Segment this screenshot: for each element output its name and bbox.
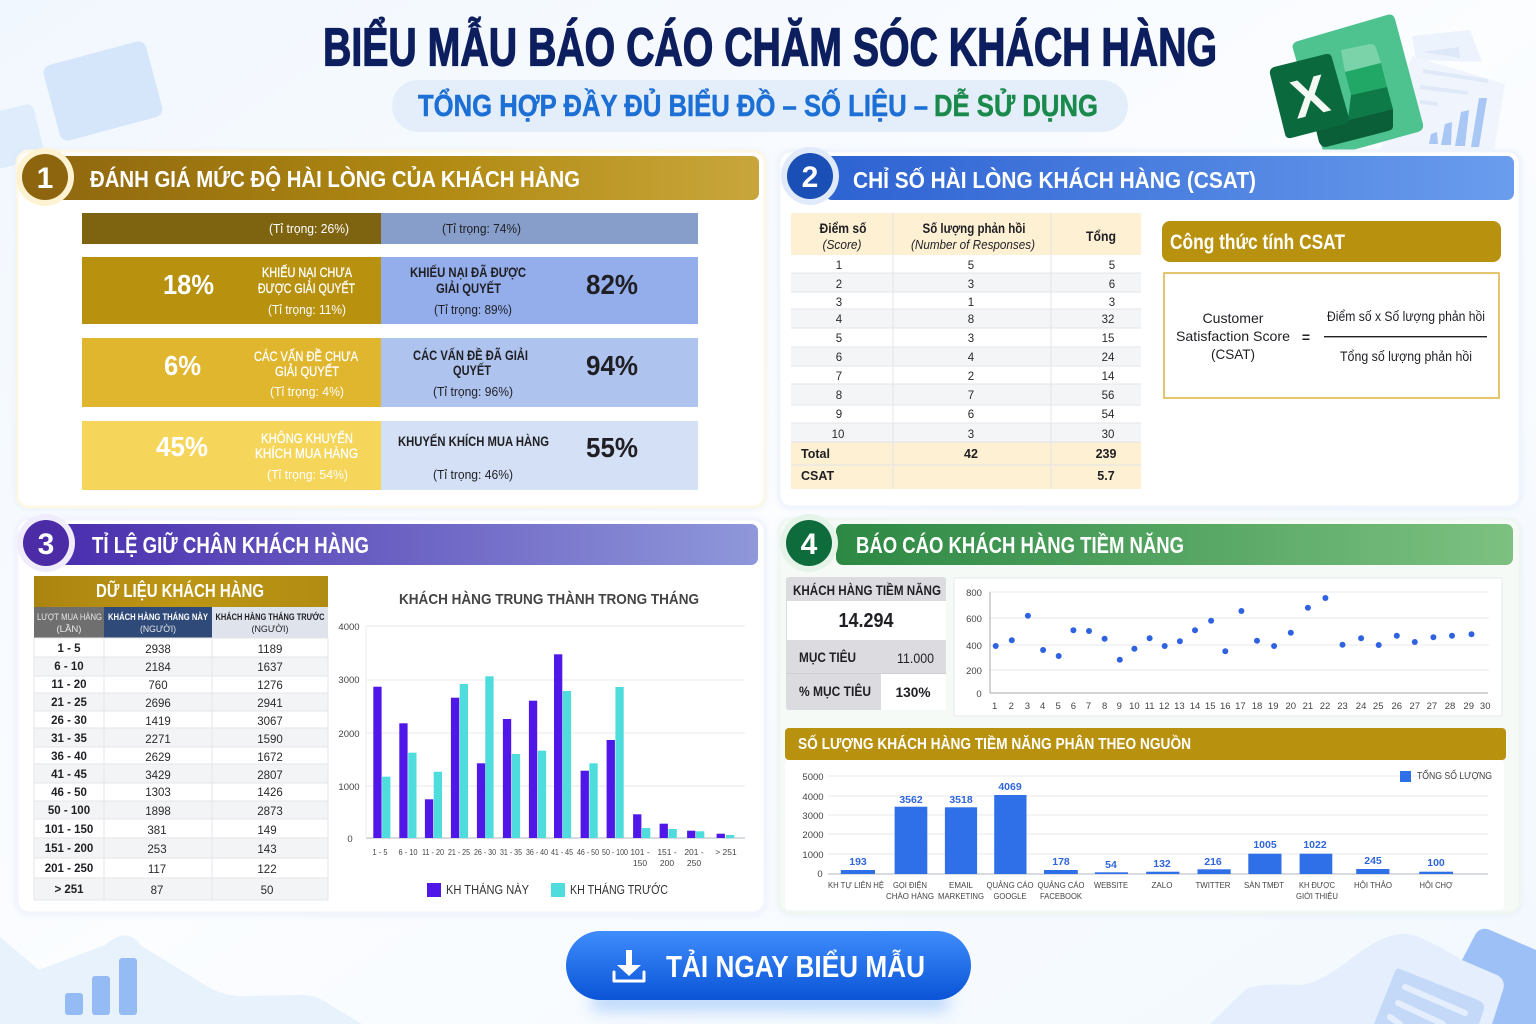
- scatter chart: [954, 578, 1502, 716]
- row: complaints: KHIẾU NẠI ĐÃ ĐƯỢC: [410, 265, 526, 280]
- x axis labels: 27: [1427, 701, 1437, 712]
- formula box: [1164, 273, 1499, 398]
- x axis labels: 150: [633, 858, 647, 868]
- x axis labels: 50 - 100: [602, 847, 628, 857]
- header bar 4: BÁO CÁO KHÁCH HÀNG TIỀM NĂNG: [856, 531, 1184, 558]
- value labels: [849, 781, 1445, 871]
- table rows: 1426: [257, 787, 283, 799]
- table totals: Total: [801, 447, 830, 461]
- table rows: 6: [1109, 279, 1115, 291]
- table column headers: KHÁCH HÀNG THÁNG TRƯỚC: [216, 611, 325, 623]
- table rows: 6 - 10: [54, 661, 84, 673]
- x axis labels: 9: [1117, 701, 1122, 712]
- category labels: [828, 879, 1453, 901]
- table rows: 1590: [257, 734, 283, 746]
- header bar 2: CHỈ SỐ HÀI LÒNG KHÁCH HÀNG (CSAT): [853, 165, 1256, 193]
- x axis labels: 26 - 30: [474, 847, 496, 857]
- table rows: 30: [1102, 429, 1114, 441]
- KPI card: KHÁCH HÀNG TIỀM NĂNG: [793, 582, 941, 598]
- x axis labels: 4: [1040, 701, 1045, 712]
- x axis labels: 200: [660, 858, 674, 868]
- bar chart: leads by source: [785, 760, 1504, 910]
- table rows: > 251: [54, 884, 84, 896]
- chart legend: [427, 882, 668, 897]
- x axis labels: 29: [1463, 701, 1474, 712]
- table rows: 2184: [145, 662, 171, 674]
- table totals: 42: [964, 447, 978, 461]
- row: weights summary: (Tỉ trọng: 74%): [442, 222, 521, 236]
- row: issues: 94%: [586, 350, 638, 381]
- formula box: (CSAT): [1211, 346, 1255, 362]
- table totals: 5.7: [1097, 469, 1115, 483]
- y axis labels: 400: [966, 641, 982, 652]
- value labels: 54: [1105, 859, 1117, 871]
- header bar 1: ĐÁNH GIÁ MỨC ĐỘ HÀI LÒNG CỦA KHÁCH HÀNG: [90, 164, 580, 192]
- y axis labels: 3000: [802, 811, 824, 822]
- table rows: 6: [836, 352, 842, 364]
- table header: Tổng: [1086, 229, 1116, 244]
- x axis labels: 27: [1410, 701, 1420, 712]
- table header: [820, 221, 1116, 252]
- bars this month: [373, 654, 725, 838]
- table rows: 2873: [257, 806, 283, 818]
- table rows: 1898: [145, 806, 171, 818]
- row: recommendation: (Tỉ trọng: 46%): [433, 467, 513, 482]
- category labels: CHÀO HÀNG: [886, 891, 934, 901]
- table rows: 4: [836, 314, 843, 326]
- header bar 1: [16, 148, 759, 206]
- table rows: 1: [968, 297, 974, 309]
- table rows: 2271: [145, 734, 171, 746]
- table rows: 381: [147, 825, 167, 837]
- table: CSAT scores: [791, 213, 1141, 489]
- category labels: SÀN TMĐT: [1244, 880, 1284, 890]
- y axis labels: 0: [347, 834, 353, 845]
- source heading: [785, 728, 1506, 760]
- table rows: 4: [968, 352, 975, 364]
- table rows: 26 - 30: [51, 715, 87, 727]
- source heading: SỐ LƯỢNG KHÁCH HÀNG TIỀM NĂNG PHÂN THEO NGUỒN: [798, 733, 1191, 753]
- table rows: 2941: [257, 698, 283, 710]
- decoration: bottom-left mountains and bars: [0, 936, 362, 1024]
- row: recommendation: KHUYẾN KHÍCH MUA HÀNG: [398, 434, 549, 449]
- table rows: 253: [147, 844, 167, 856]
- row: issues: CÁC VẤN ĐỀ CHƯA: [254, 349, 358, 364]
- bar chart: loyal customers: [338, 591, 745, 897]
- x axis labels: 21 - 25: [448, 847, 470, 857]
- table rows: 1419: [145, 716, 171, 728]
- value labels: 132: [1153, 858, 1171, 870]
- table totals: CSAT: [801, 469, 834, 483]
- chart legend: [1400, 768, 1492, 782]
- x axis labels: [992, 701, 1490, 712]
- y axis labels: 4000: [338, 622, 360, 633]
- chart legend: KH THÁNG TRƯỚC: [570, 882, 668, 897]
- category labels: EMAIL: [949, 880, 973, 890]
- table rows: 3: [968, 279, 974, 291]
- row: complaints: (Tỉ trọng: 89%): [434, 302, 512, 317]
- chart legend: KH THÁNG NÀY: [446, 882, 529, 897]
- icon: download: [614, 950, 644, 981]
- table rows: 50 - 100: [48, 805, 90, 817]
- table column headers: (LẦN): [56, 624, 82, 635]
- value labels: 193: [849, 856, 867, 868]
- x axis labels: 20: [1286, 701, 1296, 712]
- value labels: 216: [1204, 856, 1222, 868]
- bars: [841, 795, 1453, 874]
- value labels: 1022: [1303, 839, 1327, 851]
- table rows: 11 - 20: [51, 679, 87, 691]
- table column headers: (NGƯỜI): [140, 624, 176, 635]
- table column headers: [34, 607, 328, 638]
- x axis labels: 41 - 45: [551, 847, 573, 857]
- category labels: FACEBOOK: [1040, 891, 1082, 901]
- table rows: 14: [1102, 371, 1115, 383]
- table rows: 1637: [257, 662, 283, 674]
- table rows: 122: [257, 864, 277, 876]
- formula box: =: [1302, 329, 1310, 345]
- row: complaints: 18%: [163, 269, 214, 300]
- x axis labels: 151 -: [657, 847, 677, 857]
- formula box: Điểm số x Số lượng phản hồi: [1327, 309, 1485, 324]
- table rows: 7: [968, 390, 974, 402]
- formula box: Tổng số lượng phản hồi: [1340, 349, 1472, 364]
- table rows: 9: [836, 409, 842, 421]
- panel 1: customer satisfaction: [16, 148, 765, 507]
- header bar 3: 3: [38, 528, 54, 561]
- value labels: 1005: [1253, 839, 1277, 851]
- x axis labels: 25: [1373, 701, 1383, 712]
- y axis labels: 0: [976, 689, 982, 700]
- table rows: 101 - 150: [45, 824, 93, 836]
- table rows: 201 - 250: [45, 863, 93, 875]
- table rows: 5: [1109, 260, 1115, 272]
- row: weights summary: (Tỉ trọng: 26%): [269, 222, 349, 236]
- table header: Điểm số: [820, 221, 866, 236]
- x axis labels: 10: [1129, 701, 1140, 712]
- value labels: 3518: [949, 794, 973, 806]
- table header: (Score): [822, 238, 862, 252]
- row: recommendation: [82, 421, 698, 490]
- table rows: 15: [1102, 333, 1114, 345]
- KPI card: 14.294: [838, 610, 894, 632]
- table totals: 239: [1096, 447, 1116, 461]
- download button: [566, 931, 971, 1012]
- x axis labels: 7: [1086, 701, 1091, 712]
- table rows: 7: [836, 371, 842, 383]
- table rows: 3429: [145, 770, 171, 782]
- icon: Excel logo: [1270, 14, 1423, 156]
- row: issues: (Tỉ trọng: 96%): [433, 384, 513, 399]
- table title: [34, 576, 328, 607]
- value labels: 178: [1052, 856, 1070, 868]
- x axis labels: 11: [1145, 701, 1155, 712]
- category labels: MARKETING: [938, 891, 984, 901]
- x axis labels: 17: [1235, 701, 1246, 712]
- row: complaints: GIẢI QUYẾT: [436, 281, 502, 296]
- category labels: QUẢNG CÁO: [986, 879, 1034, 890]
- table column headers: LƯỢT MUA HÀNG: [37, 612, 102, 623]
- table rows: 21 - 25: [51, 697, 88, 709]
- x axis labels: > 251: [715, 847, 737, 857]
- row: recommendation: KHÍCH MUA HÀNG: [255, 446, 358, 461]
- category labels: HỘI THẢO: [1354, 879, 1392, 890]
- x axis labels: 26: [1392, 701, 1402, 712]
- decoration: bottom-right document: [1210, 929, 1536, 1024]
- table header: (Number of Responses): [911, 238, 1035, 252]
- header bar 2: [781, 147, 1514, 205]
- KPI card: [786, 577, 946, 710]
- value labels: 4069: [998, 781, 1022, 793]
- table title: DỮ LIỆU KHÁCH HÀNG: [96, 580, 264, 601]
- subtitle pill: DỄ SỬ DỤNG: [934, 87, 1098, 123]
- row: recommendation: 55%: [586, 432, 638, 463]
- y axis labels: 600: [966, 614, 982, 625]
- bars last month: [382, 676, 734, 838]
- y axis labels: 2000: [802, 830, 824, 841]
- x axis labels: 11 - 20: [422, 847, 444, 857]
- table rows: 10: [832, 429, 844, 441]
- category labels: KH ĐƯỢC: [1299, 880, 1335, 890]
- x axis labels: 13: [1174, 701, 1185, 712]
- table rows: 87: [151, 885, 163, 897]
- x axis labels: 6: [1071, 701, 1076, 712]
- y axis labels: 2000: [338, 729, 360, 740]
- row: recommendation: (Tỉ trọng: 54%): [267, 467, 348, 482]
- row: weights summary: [82, 213, 698, 244]
- table rows: 32: [1102, 314, 1114, 326]
- table rows: 1672: [257, 752, 283, 764]
- panel 3: retention: [17, 514, 765, 913]
- table rows: 1 - 5: [57, 643, 81, 655]
- table rows: 24: [1102, 352, 1115, 364]
- x axis labels: 23: [1337, 701, 1348, 712]
- row: complaints: [82, 257, 698, 324]
- table rows: 56: [1102, 390, 1114, 402]
- table rows: 2629: [145, 752, 171, 764]
- x axis labels: [372, 847, 737, 868]
- y axis labels: [802, 772, 824, 880]
- x axis labels: 101 -: [630, 847, 650, 857]
- x axis labels: 201 -: [684, 847, 704, 857]
- x axis labels: 31 - 35: [500, 847, 522, 857]
- table rows: 54: [1102, 409, 1115, 421]
- row: issues: [82, 338, 698, 407]
- table rows: 3: [968, 429, 974, 441]
- value labels: 245: [1364, 855, 1382, 867]
- icon: background report document: [1380, 30, 1505, 150]
- title: BIỂU MẪU BÁO CÁO CHĂM SÓC KHÁCH HÀNG: [323, 16, 1217, 78]
- table: customer data: [34, 576, 328, 900]
- x axis labels: 21: [1303, 701, 1313, 712]
- table rows: 46 - 50: [51, 787, 87, 799]
- table rows: [832, 260, 1115, 441]
- x axis labels: 14: [1190, 701, 1200, 712]
- table rows: 3: [1109, 297, 1115, 309]
- x axis labels: 2: [1009, 701, 1014, 712]
- y axis labels: 3000: [338, 675, 360, 686]
- table rows: 8: [836, 390, 842, 402]
- x axis labels: 28: [1445, 701, 1455, 712]
- table rows: 1303: [145, 787, 171, 799]
- value labels: 3562: [899, 794, 923, 806]
- x axis labels: 18: [1252, 701, 1262, 712]
- table rows: 1189: [258, 644, 282, 656]
- table rows: 3: [968, 333, 974, 345]
- row: issues: GIẢI QUYẾT: [275, 364, 339, 379]
- chart legend: TỔNG SỐ LƯỢNG: [1417, 768, 1492, 782]
- table rows: 2938: [145, 644, 171, 656]
- y axis labels: 4000: [802, 792, 824, 803]
- table rows: 1276: [257, 680, 283, 692]
- category labels: GIỚI THIỆU: [1296, 891, 1338, 901]
- x axis labels: 30: [1480, 701, 1490, 712]
- table column headers: (NGƯỜI): [252, 624, 288, 635]
- category labels: GOOGLE: [994, 891, 1027, 901]
- row: recommendation: 45%: [156, 431, 208, 462]
- x axis labels: 22: [1320, 701, 1330, 712]
- formula heading: [1162, 221, 1501, 262]
- subtitle pill: TỔNG HỢP ĐẦY ĐỦ BIỂU ĐỒ – SỐ LIỆU –: [418, 87, 928, 123]
- category labels: GỌI ĐIỆN: [893, 880, 927, 890]
- header bar 3: TỈ LỆ GIỮ CHÂN KHÁCH HÀNG: [92, 530, 369, 558]
- category labels: HỘI CHỢ: [1420, 880, 1453, 890]
- table rows: 2696: [145, 698, 171, 710]
- category labels: ZALO: [1152, 880, 1173, 890]
- table rows: 143: [257, 844, 277, 856]
- formula box: Customer: [1202, 310, 1264, 326]
- table totals: [801, 447, 1116, 483]
- panel 4: potential customers: [779, 514, 1520, 913]
- panel 2: CSAT: [779, 147, 1520, 507]
- header bar 4: [780, 514, 1513, 572]
- x axis labels: 24: [1356, 701, 1366, 712]
- y axis labels: 200: [966, 666, 982, 677]
- table rows: 3: [836, 297, 842, 309]
- download button: TẢI NGAY BIỂU MẪU: [666, 949, 925, 984]
- table rows: 8: [968, 314, 974, 326]
- header bar 3: [17, 514, 758, 572]
- KPI card: % MỤC TIÊU: [799, 682, 871, 699]
- table rows: 5: [836, 333, 842, 345]
- x axis labels: 1: [992, 701, 997, 712]
- x axis labels: 36 - 40: [526, 847, 548, 857]
- table rows: 2: [836, 279, 842, 291]
- category labels: QUẢNG CÁO: [1038, 879, 1085, 890]
- table rows: 3067: [257, 716, 283, 728]
- category labels: KH TỰ LIÊN HỆ: [828, 880, 884, 890]
- x axis labels: 15: [1205, 701, 1215, 712]
- x axis labels: 250: [687, 858, 701, 868]
- x axis labels: 19: [1268, 701, 1278, 712]
- x axis labels: 6 - 10: [398, 847, 418, 857]
- table rows: 6: [968, 409, 974, 421]
- row: complaints: 82%: [586, 269, 638, 300]
- table rows: 36 - 40: [51, 751, 87, 763]
- table rows: 31 - 35: [51, 733, 88, 745]
- KPI card: 11.000: [897, 650, 934, 666]
- subtitle pill: [392, 80, 1128, 132]
- header bar 1: 1: [37, 162, 53, 195]
- row: issues: CÁC VẤN ĐỀ ĐÃ GIẢI: [413, 348, 528, 363]
- row: issues: (Tỉ trọng: 4%): [270, 384, 344, 399]
- y axis labels: 0: [817, 869, 823, 880]
- table rows: 50: [261, 885, 273, 897]
- header bar 2: 2: [802, 161, 818, 194]
- table rows: 149: [257, 825, 277, 837]
- x axis labels: 8: [1102, 701, 1107, 712]
- table rows: 41 - 45: [51, 769, 88, 781]
- y axis labels: 1000: [802, 850, 824, 861]
- row: issues: QUYẾT: [453, 363, 492, 378]
- KPI card: 130%: [896, 684, 931, 700]
- x axis labels: 16: [1220, 701, 1231, 712]
- table rows: [45, 643, 283, 897]
- table rows: 1: [836, 260, 842, 272]
- x axis labels: 12: [1159, 701, 1169, 712]
- y axis labels: [966, 588, 982, 700]
- category labels: WEBSITE: [1094, 880, 1128, 890]
- x axis labels: 46 - 50: [577, 847, 599, 857]
- y axis labels: 1000: [338, 782, 360, 793]
- x axis labels: 5: [1056, 701, 1061, 712]
- table rows: 5: [968, 260, 974, 272]
- table rows: 117: [148, 864, 166, 876]
- header bar 4: 4: [801, 528, 818, 561]
- value labels: 100: [1427, 857, 1445, 869]
- decoration: top-left cards: [0, 40, 164, 173]
- y axis labels: 800: [966, 588, 982, 599]
- formula box: Satisfaction Score: [1176, 328, 1290, 344]
- table rows: 151 - 200: [45, 843, 93, 855]
- row: complaints: ĐƯỢC GIẢI QUYẾT: [258, 281, 355, 296]
- table rows: 2: [968, 371, 974, 383]
- icon: Excel logo: X: [1285, 64, 1335, 130]
- data points: [993, 595, 1474, 663]
- table rows: 760: [148, 680, 168, 692]
- row: complaints: (Tỉ trọng: 11%): [268, 302, 346, 317]
- KPI card: MỤC TIÊU: [799, 648, 856, 665]
- formula heading: Công thức tính CSAT: [1170, 231, 1345, 254]
- category labels: TWITTER: [1196, 880, 1230, 890]
- row: recommendation: KHÔNG KHUYẾN: [261, 431, 353, 446]
- chart title: KHÁCH HÀNG TRUNG THÀNH TRONG THÁNG: [399, 591, 699, 608]
- table rows: 2807: [257, 770, 283, 782]
- y axis labels: 5000: [802, 772, 824, 783]
- row: issues: 6%: [164, 350, 201, 381]
- table column headers: KHÁCH HÀNG THÁNG NÀY: [108, 612, 209, 623]
- table header: Số lượng phản hồi: [922, 221, 1026, 236]
- x axis labels: 3: [1025, 701, 1030, 712]
- y axis labels: [338, 622, 360, 845]
- row: complaints: KHIẾU NẠI CHƯA: [262, 265, 352, 280]
- x axis labels: 1 - 5: [372, 847, 388, 857]
